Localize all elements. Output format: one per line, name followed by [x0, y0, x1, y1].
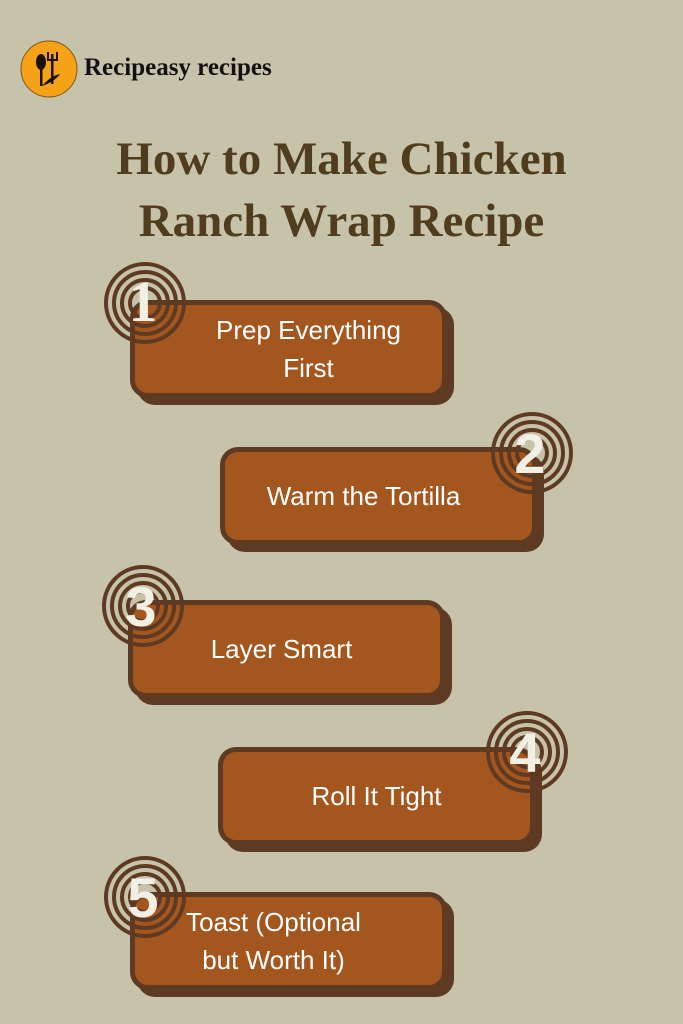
- step 4: Roll It Tight: [311, 781, 442, 811]
- number 3: 3: [125, 575, 157, 638]
- number 2: 2: [514, 422, 546, 485]
- number 1: [104, 262, 186, 344]
- step 5: Toast (Optional: [186, 907, 361, 937]
- step 2: [220, 447, 544, 552]
- number 3: [102, 565, 184, 647]
- icon: logo circle: [20, 40, 78, 98]
- number 4: 4: [509, 721, 541, 784]
- title: How to Make Chicken: [116, 133, 567, 185]
- step 1: First: [283, 353, 334, 383]
- brand name: Recipeasy recipes: [84, 54, 272, 81]
- step 4: [218, 747, 542, 852]
- number 1: 1: [128, 269, 158, 334]
- title: Ranch Wrap Recipe: [139, 195, 544, 247]
- title: [116, 133, 567, 247]
- number 4: [486, 711, 568, 793]
- number 5: [104, 856, 186, 938]
- number 2: [491, 412, 573, 494]
- step 3: [128, 600, 452, 705]
- step 5: but Worth It): [202, 945, 345, 975]
- step 3: Layer Smart: [211, 634, 352, 664]
- step 2: Warm the Tortilla: [267, 481, 460, 511]
- step 1: Prep Everything: [216, 315, 401, 345]
- number 5: 5: [127, 866, 159, 929]
- step 1: [130, 300, 454, 405]
- logo: [20, 40, 272, 98]
- step 5: [130, 892, 454, 997]
